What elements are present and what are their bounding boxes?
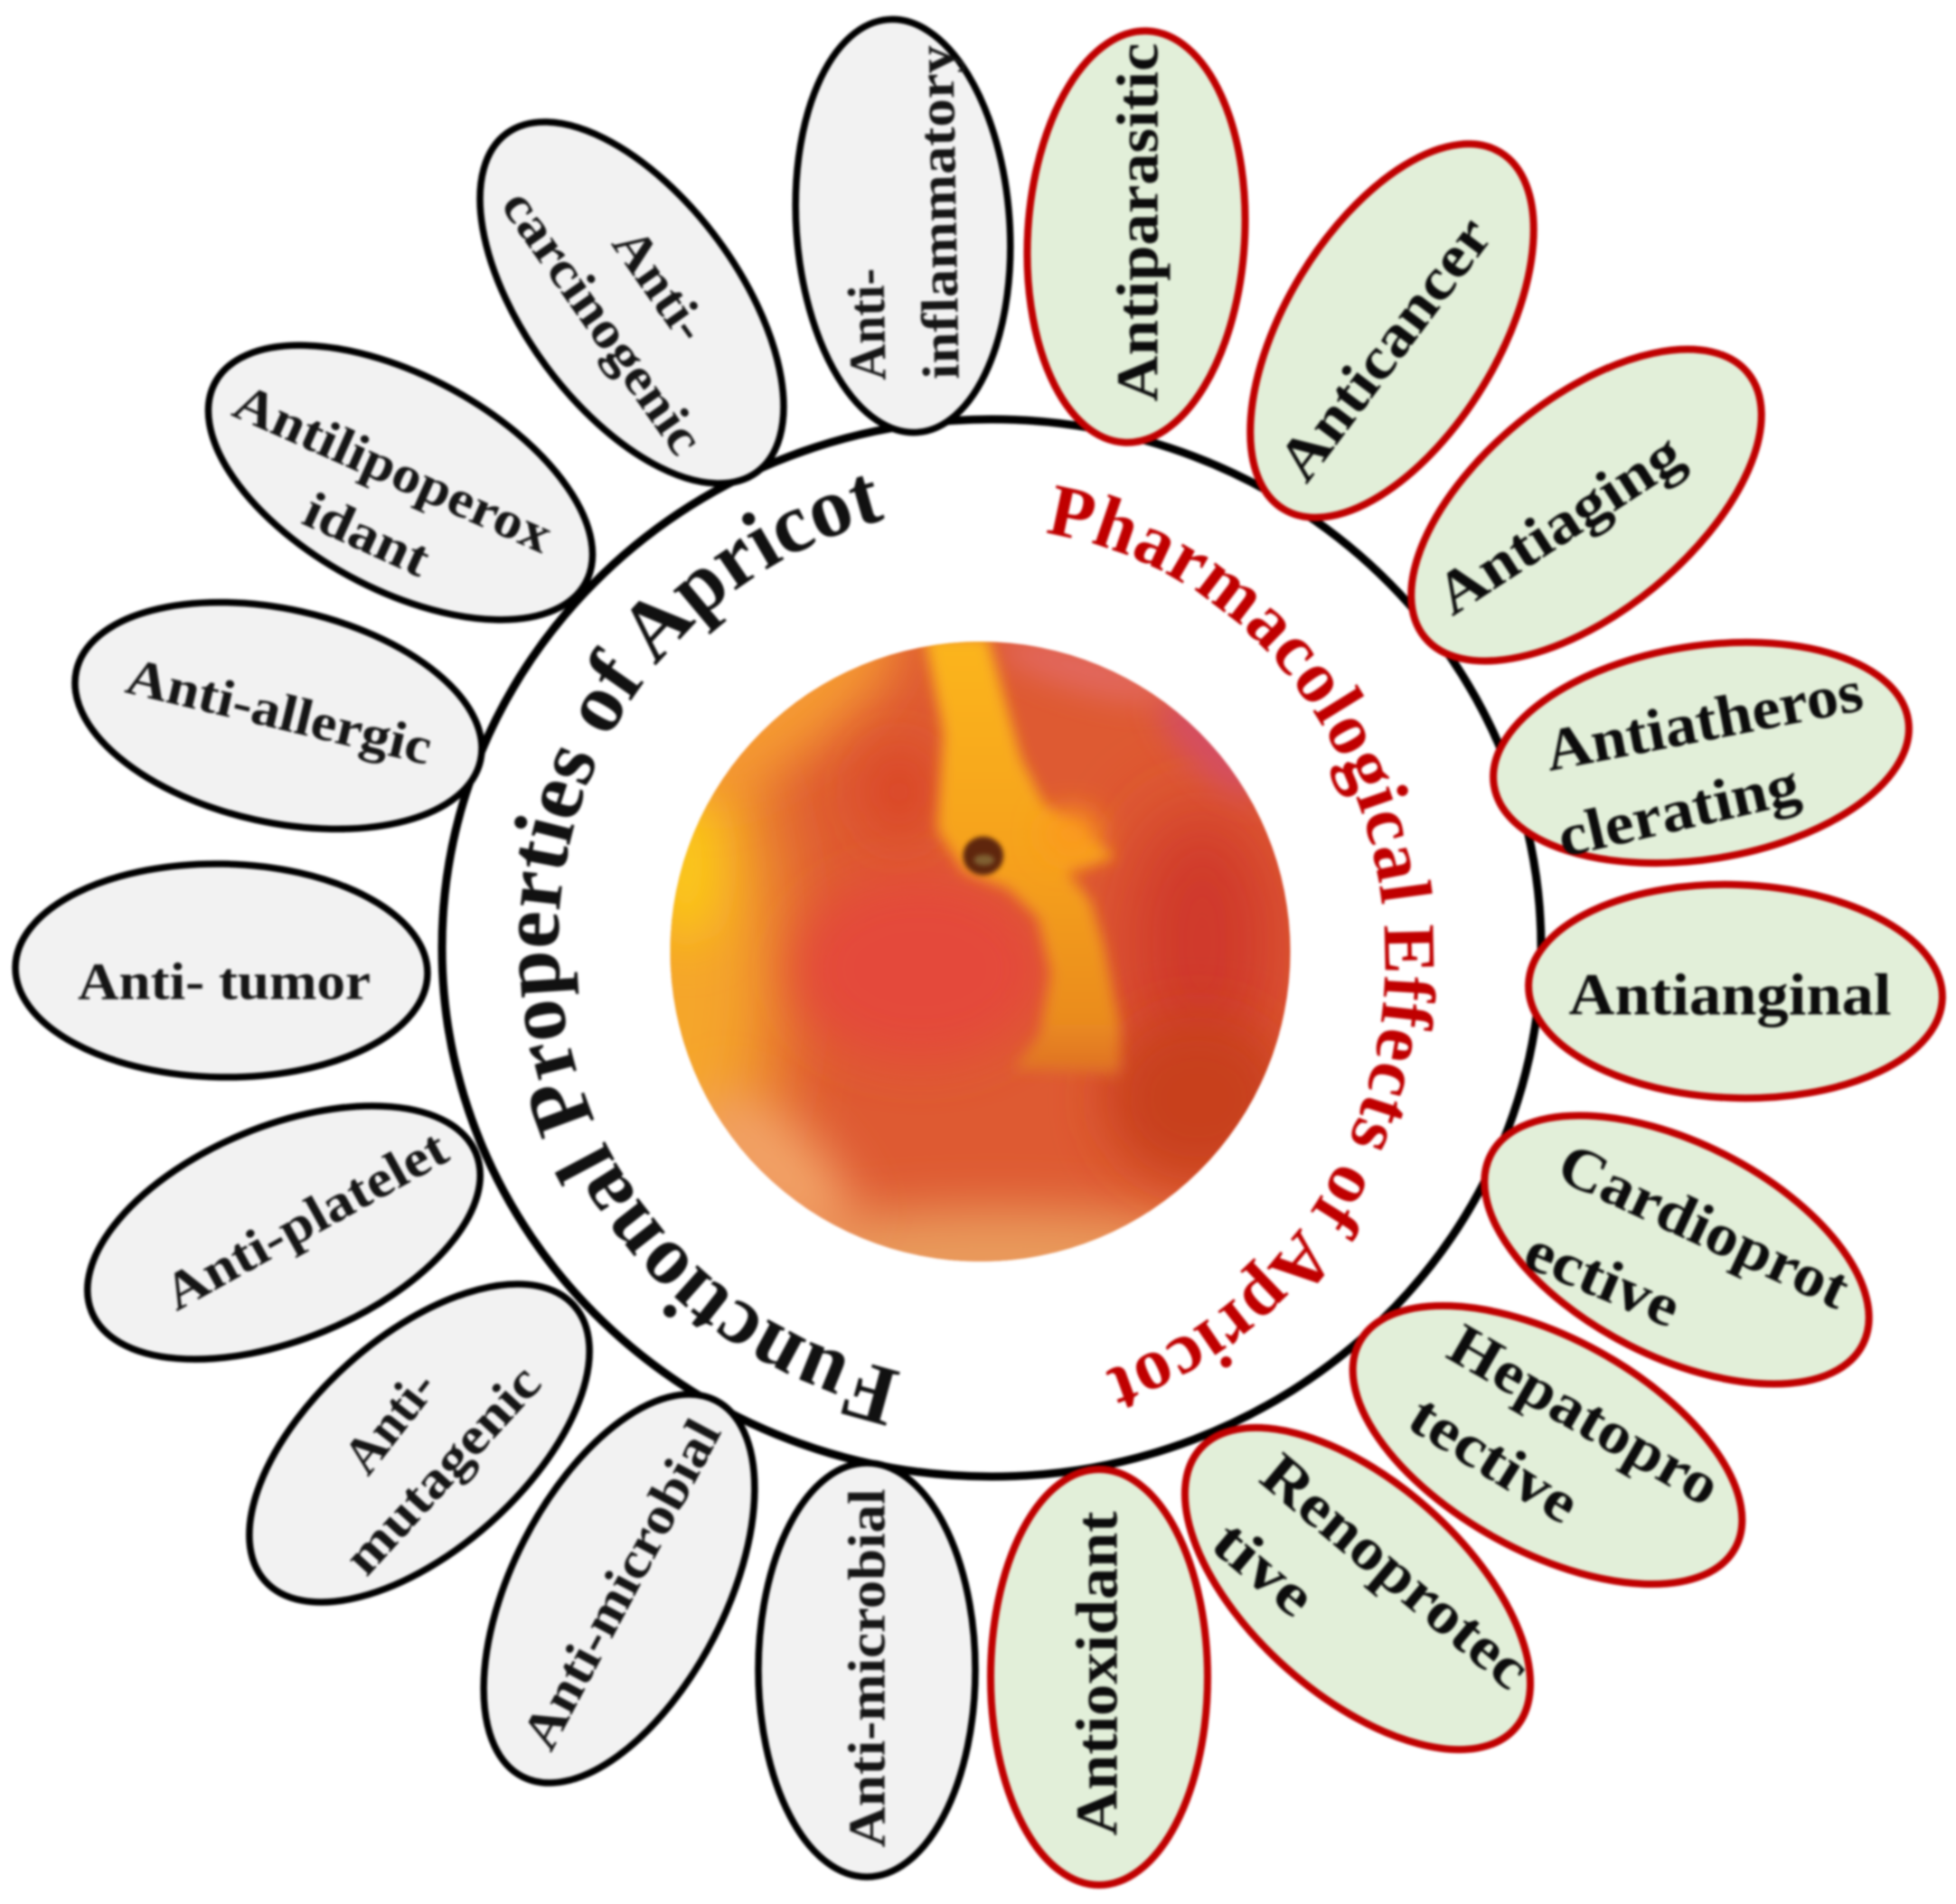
petal: Antilipoperoxidant [165,288,636,677]
petal: Cardioprotective: Cardioprot [1548,1130,1859,1322]
petal: Renoprotective: Renoprotec [1248,1440,1543,1702]
petal: Hepatoprotective [1308,1248,1787,1642]
petal: Renoprotective: tive [1199,1507,1328,1630]
petal: Antiaging: Antiaging [1424,420,1695,628]
apricot fruit [669,640,1293,1263]
petal: Antiatherosclerating [1477,614,1925,891]
petal: Anti-platelet: Anti-platelet [154,1118,458,1322]
petal: Antilipoperoxidant: Antilipoperox [225,371,561,565]
petal: Anti-microbial (bottom) [758,1463,975,1877]
petal: Anti-mutagenic: Anti- [331,1358,448,1485]
petal: Anti-inflammatory: Anti- [836,267,898,381]
petal: Anti-inflammatory: inflammatory [906,44,971,380]
petal: Anticancer [1192,97,1592,565]
petal: Antiparasitic [1016,24,1256,449]
petal: Antiparasitic: Antiparasitic [1105,42,1171,402]
petal: Antilipoperoxidant: idant [295,480,440,588]
petal: Anti-allergic [53,567,503,865]
petal: Cardioprotective: ective [1515,1216,1690,1341]
petal: Anti-carcinogenic: Anti- [601,217,720,352]
petal: Anti-platelet [51,1055,517,1411]
petal: Renoprotective [1129,1369,1586,1808]
petal: Anti-microbial (bottom): Anti-microbial [837,1488,897,1848]
petal: Anti-carcinogenic: carcinogenic [490,178,716,465]
petal: Antiatherosclerating: Antiatheros [1539,658,1868,784]
petal: Hepatoprotective: tective [1397,1382,1591,1537]
petal: Anticancer: Anticancer [1265,204,1505,493]
petal: Anti-microbial (left) [428,1352,811,1825]
petal: Anti-allergic: Anti-allergic [121,646,437,776]
petal: Anti-inflammatory [782,12,1024,440]
petal: Anti-microbial (left): Anti-microbial [510,1410,732,1759]
petal: Anti-carcinogenic [421,70,842,535]
curved heading: pharmacological effects: Pharmacological Effects of Apricot [1045,483,1438,1410]
petal: Hepatoprotective: Hepatopro [1437,1311,1732,1519]
petal: Anti-tumor [14,860,429,1081]
petal: Anti-mutagenic: mutagenic [332,1353,552,1586]
petal: Antioxidant: Antioxidant [1065,1511,1130,1835]
petal: Anti-tumor: Anti- tumor [78,952,371,1010]
petal: Cardioprotective [1443,1060,1911,1440]
petal: Antiatherosclerating: clerating [1551,751,1806,870]
petal: Anti-mutagenic [194,1226,644,1660]
petal: Antianginal: Antianginal [1569,961,1891,1028]
petal: Antianginal [1525,877,1946,1105]
petal: Antiaging [1358,290,1815,720]
outer ring [442,419,1541,1477]
curved heading: functional properties: Functional Properties of Apricot [513,474,902,1428]
petal: Antioxidant [991,1469,1208,1885]
